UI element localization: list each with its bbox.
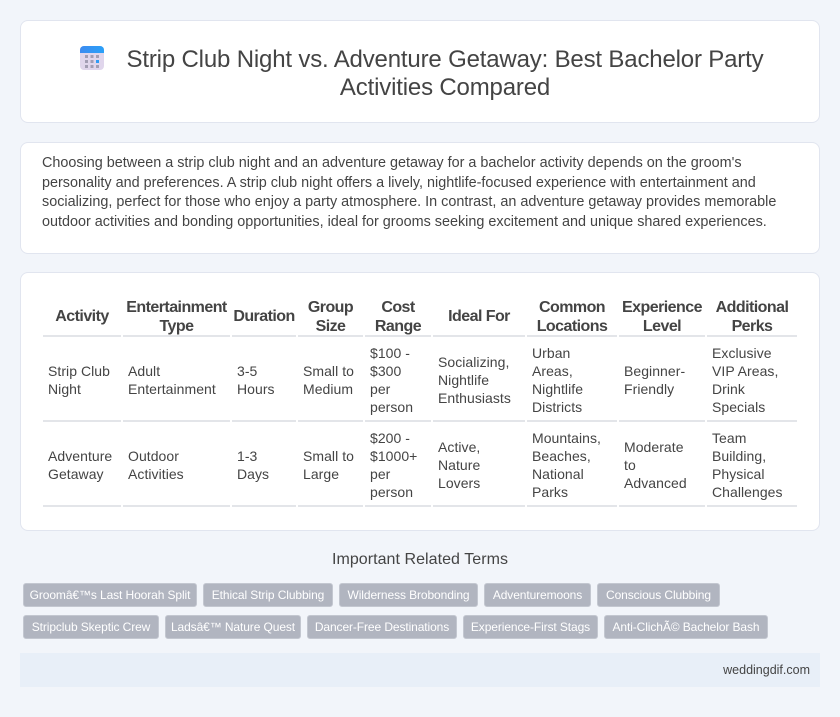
comparison table: National — [532, 466, 584, 482]
comparison table: Moderate — [624, 439, 684, 455]
comparison table: Group — [308, 299, 353, 316]
related terms tags: Anti-ClichÃ© Bachelor Bash — [612, 620, 759, 634]
comparison table: person — [370, 399, 413, 415]
comparison table: Level — [643, 318, 681, 335]
comparison table: Days — [237, 466, 269, 482]
related terms tags: Experience-First Stags — [471, 620, 590, 634]
comparison table: Range — [375, 318, 421, 335]
comparison table: Physical — [712, 466, 765, 482]
comparison table: Friendly — [624, 381, 674, 397]
comparison table: Mountains, — [532, 430, 601, 446]
comparison table: Urban — [532, 345, 570, 361]
text block: description: personality and preferences. A strip club night offers a lively, nightlife-focused experience with entertainment and — [42, 175, 756, 191]
heading: related terms: Important Related Terms — [332, 551, 508, 568]
title: Strip Club Night vs. Adventure Getaway: Best Bachelor Party — [127, 46, 763, 73]
icon: calendar — [80, 46, 104, 70]
comparison table: Entertainment — [126, 299, 227, 316]
title — [127, 46, 764, 101]
comparison table: Large — [303, 466, 339, 482]
related terms tags: Conscious Clubbing — [606, 588, 711, 602]
comparison table: Districts — [532, 399, 582, 415]
comparison table: Areas, — [532, 363, 573, 379]
comparison table: $300 — [370, 363, 401, 379]
comparison table: $200 - — [370, 430, 410, 446]
comparison table: Perks — [732, 318, 772, 335]
comparison table: Specials — [712, 399, 765, 415]
comparison table: VIP Areas, — [712, 363, 778, 379]
comparison table: Team — [712, 430, 746, 446]
title: Activities Compared — [340, 74, 550, 101]
comparison table: Getaway — [48, 466, 104, 482]
panel: description — [20, 142, 820, 254]
related terms tags: Dancer-Free Destinations — [315, 620, 449, 634]
text block: description: socializing, perfect for those who enjoy a party atmosphere. In contrast, an adventure getaway provides memorable — [42, 194, 776, 210]
comparison table: Duration — [233, 308, 295, 324]
comparison table: Hours — [237, 381, 275, 397]
comparison table: Small to — [303, 448, 354, 464]
comparison table: Active, — [438, 439, 480, 455]
comparison table: Small to — [303, 363, 354, 379]
comparison table: Type — [160, 318, 193, 335]
panel: header — [20, 20, 820, 123]
text block: description: outdoor activities and bonding opportunities, ideal for grooms seeking excitement and unique shared experiences. — [42, 214, 767, 230]
text block: description: Choosing between a strip club night and an adventure getaway for a bachelor activity depends on the groom's — [42, 155, 742, 171]
comparison table: 3-5 — [237, 363, 257, 379]
comparison table: Size — [316, 318, 345, 335]
text block: description — [42, 155, 776, 230]
comparison table: Advanced — [624, 475, 687, 491]
comparison table: to — [624, 457, 636, 473]
comparison table: Lovers — [438, 475, 480, 491]
comparison table: per — [370, 381, 390, 397]
comparison table: Exclusive — [712, 345, 772, 361]
related terms tags: Ladsâ€™ Nature Quest — [171, 620, 295, 634]
related terms tags: Stripclub Skeptic Crew — [32, 620, 150, 634]
comparison table: Cost — [381, 299, 415, 316]
related terms tags: Adventuremoons — [493, 588, 582, 602]
comparison table: Ideal For — [448, 308, 510, 324]
comparison table: Beaches, — [532, 448, 591, 464]
comparison table: Nightlife — [438, 372, 489, 388]
comparison table: Entertainment — [128, 381, 216, 397]
related terms tags: Ethical Strip Clubbing — [212, 588, 324, 602]
comparison table: per — [370, 466, 390, 482]
comparison table: Strip Club — [48, 363, 110, 379]
related terms tags — [23, 583, 768, 639]
comparison table: Nightlife — [532, 381, 583, 397]
related terms tags: Wilderness Brobonding — [348, 588, 469, 602]
comparison table: $100 - — [370, 345, 410, 361]
comparison table: Nature — [438, 457, 480, 473]
comparison table: Activities — [128, 466, 184, 482]
comparison table: Adventure — [48, 448, 112, 464]
comparison table: Medium — [303, 381, 353, 397]
panel: comparison table — [20, 272, 820, 531]
related terms tags: Groomâ€™s Last Hoorah Split — [30, 588, 190, 602]
comparison table: Night — [48, 381, 81, 397]
comparison table: Parks — [532, 484, 568, 500]
comparison table: Adult — [128, 363, 160, 379]
comparison table: Additional — [716, 299, 788, 316]
comparison table: 1-3 — [237, 448, 257, 464]
comparison table: Beginner- — [624, 363, 685, 379]
comparison table: Socializing, — [438, 354, 509, 370]
comparison table: Outdoor — [128, 448, 179, 464]
comparison table: Enthusiasts — [438, 390, 511, 406]
comparison table: Experience — [622, 299, 702, 316]
footer: weddingdif.com — [723, 663, 810, 677]
comparison table: Locations — [537, 318, 607, 335]
comparison table: $1000+ — [370, 448, 417, 464]
comparison table: person — [370, 484, 413, 500]
comparison table: Activity — [55, 308, 109, 324]
comparison table: Common — [539, 299, 605, 316]
comparison table — [43, 299, 797, 507]
footer — [20, 653, 820, 687]
comparison table: Drink — [712, 381, 745, 397]
comparison table: Building, — [712, 448, 766, 464]
comparison table: Challenges — [712, 484, 783, 500]
